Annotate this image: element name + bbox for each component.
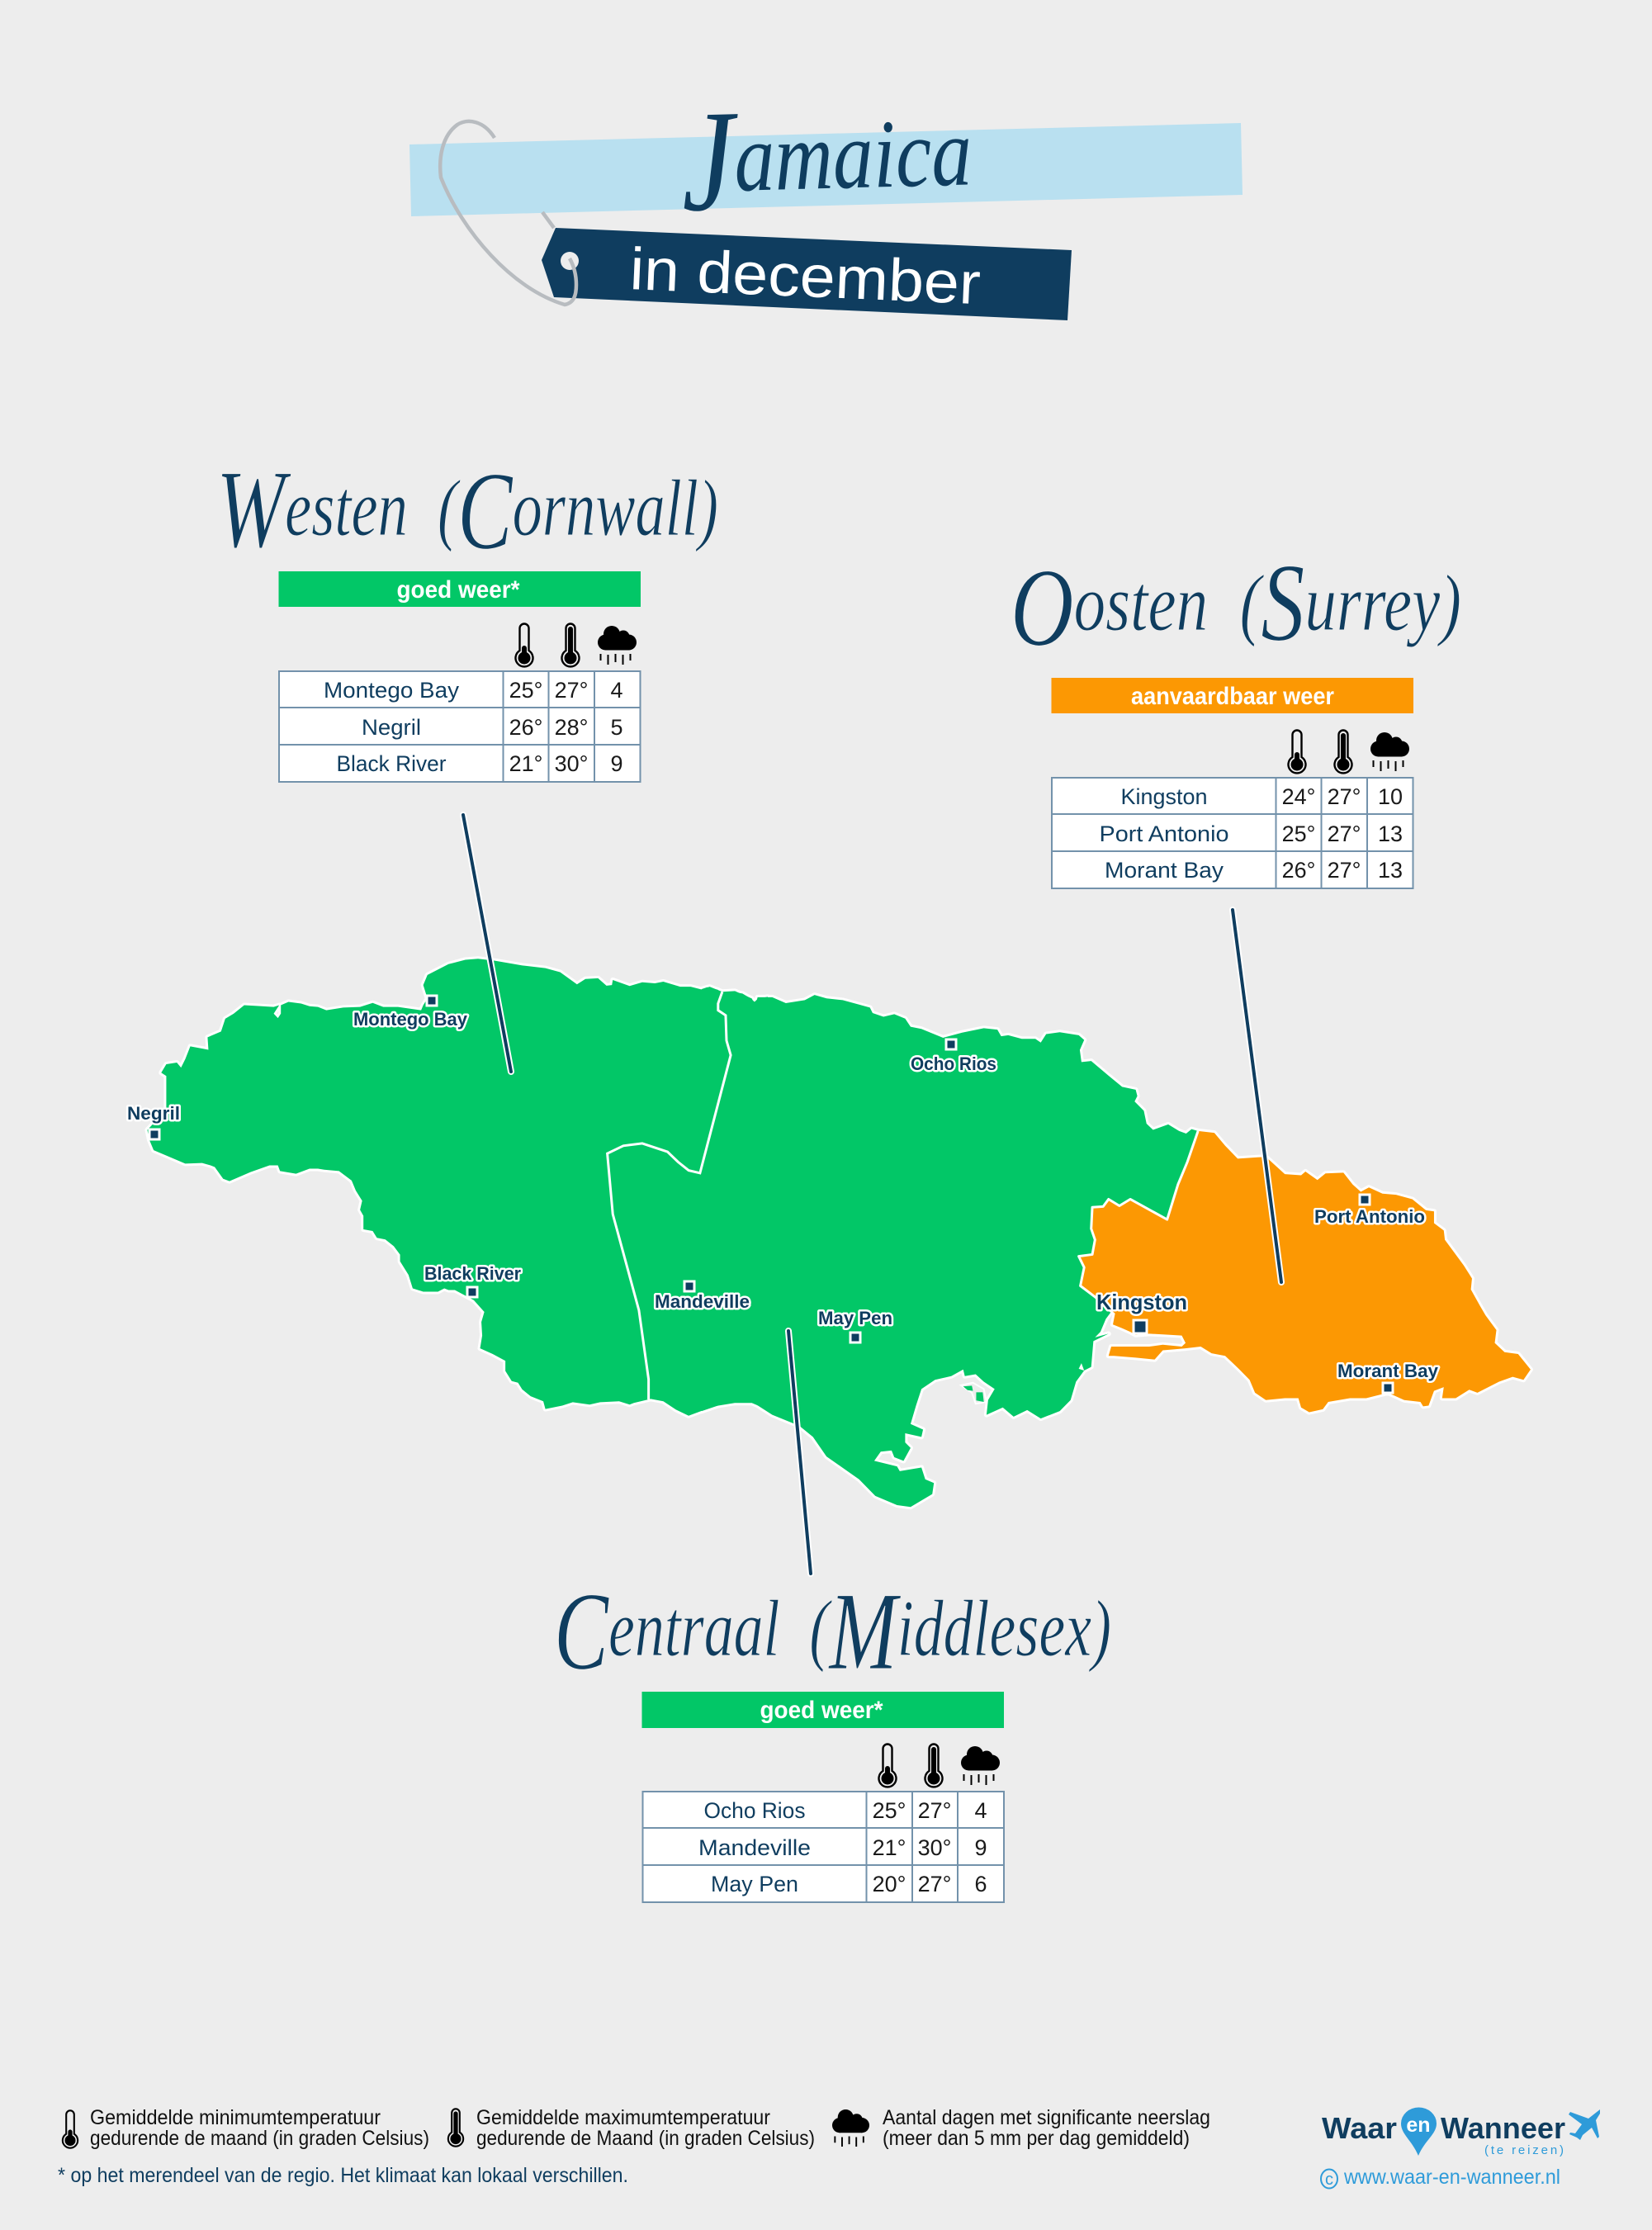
city: May Pen [818,1308,892,1342]
climate table: 26° [1282,858,1315,883]
climate table: 28° [555,715,588,740]
legend [58,2106,1210,2187]
legend text: precipitation: Aantal dagen met significante neerslag [883,2106,1210,2129]
climate table: 10 [1378,784,1403,809]
legend text: maximum temperature: gedurende de Maand (in graden Celsius) [476,2127,815,2150]
climate table: 20° [873,1872,906,1896]
heading: Westen (Cornwall): W [216,448,291,571]
city: Morant Bay: Morant Bay [1337,1361,1439,1381]
city: Ocho Rios [911,1039,996,1074]
tag string [440,121,576,305]
heading: Centraal (Middlesex): C [554,1570,609,1693]
text: in december: in december [628,236,982,317]
logo word: en: en [1406,2114,1431,2137]
pointer line: east [1233,910,1281,1282]
tag eyelet [561,252,579,270]
region border west-central [608,992,731,1399]
climate table: 30° [918,1835,951,1860]
climate table: 25° [1282,821,1315,846]
climate table: 27° [555,678,588,703]
climate table: Kingston [1121,784,1207,809]
title: Jamaica: amaica [733,97,973,212]
city: Kingston [1096,1290,1187,1333]
logo tagline: (te reizen) [1484,2143,1565,2157]
city: Ocho Rios: Ocho Rios [911,1053,996,1074]
copyright circle: c [1325,2171,1333,2189]
climate table: Morant Bay [1105,858,1224,883]
copyright circle [1321,2170,1337,2189]
icon: minimum temperature [878,1744,897,1787]
logo plane [1569,2109,1600,2140]
climate table: 21° [509,751,542,776]
city: Black River: Black River [424,1263,521,1284]
weather rating bar: aanvaardbaar weer [1131,683,1334,710]
title: Jamaica: J [679,80,741,242]
climate table: 25° [873,1798,906,1823]
heading: Oosten (Surrey): O [1011,547,1074,670]
icon: rain [1370,732,1409,771]
website url: www.waar-en-wanneer.nl [1343,2166,1560,2189]
climate table: 26° [509,715,542,740]
heading: Centraal (Middlesex): entraal ( [608,1584,832,1674]
climate table: 27° [918,1798,951,1823]
map of Jamaica [147,959,1531,1507]
climate table: Montego Bay [324,678,460,703]
west and central region fill [147,959,1198,1507]
city: Montego Bay [353,996,468,1030]
city: Mandeville: Mandeville [655,1291,750,1312]
climate table: 25° [509,678,542,703]
climate table: Black River [337,751,447,776]
climate table: Ocho Rios [703,1798,806,1823]
icon: maximum temperature [925,1744,943,1787]
pointer line: west [463,815,511,1072]
city: Montego Bay: Montego Bay [353,1009,468,1030]
logo pin [1401,2108,1437,2156]
climate table: Negril [362,715,421,740]
bay with islets [961,1383,987,1404]
icon: minimum temperature [515,624,533,666]
climate table: 9 [974,1835,987,1860]
city: Port Antonio: Port Antonio [1314,1206,1425,1227]
icon: minimum temperature [1288,730,1306,773]
heading: Westen (Cornwall): esten ( [285,464,461,553]
climate table: 4 [974,1798,987,1823]
climate table: 4 [610,678,623,703]
panel: central [554,1570,1111,1902]
climate table: 13 [1378,821,1403,846]
legend text: minimum temperature: Gemiddelde minimumtemperatuur [90,2106,381,2129]
icon: legend maximum temperature [448,2109,463,2147]
icon: rain [961,1746,1000,1785]
city: Kingston: Kingston [1096,1290,1187,1314]
climate table: 6 [974,1872,987,1896]
icon: rain [598,626,637,665]
east region fill [1079,1131,1531,1412]
city: Negril [127,1103,180,1139]
city: Negril: Negril [127,1103,180,1124]
heading: Centraal (Middlesex): M [828,1570,902,1693]
heading: Westen (Cornwall): C [457,450,514,573]
climate table: 27° [918,1872,951,1896]
city: May Pen: May Pen [818,1308,892,1328]
panel: west [216,448,718,782]
climate table: 9 [610,751,623,776]
city: Morant Bay [1337,1361,1439,1393]
climate table: Port Antonio [1100,821,1228,846]
icon: legend minimum temperature [63,2110,78,2148]
legend text: precipitation: (meer dan 5 mm per dag gemiddeld) [883,2127,1190,2150]
weather rating bar [642,1692,1004,1728]
city: Port Antonio [1314,1195,1425,1227]
climate table [642,1792,1004,1902]
icon: maximum temperature [561,624,580,666]
weather rating bar [279,571,641,607]
icon: maximum temperature [1334,730,1352,773]
legend text: minimum temperature: gedurende de maand (in graden Celsius) [90,2127,429,2150]
panel: east [1011,542,1461,888]
climate table [1052,778,1413,888]
climate table: 30° [555,751,588,776]
city: Black River [424,1263,521,1297]
logo word: Wanneer: Wanneer [1441,2111,1565,2145]
city: Mandeville [655,1281,750,1312]
footnote: * op het merendeel van de regio. Het klimaat kan lokaal verschillen. [58,2164,628,2187]
climate table [279,671,641,782]
legend text: maximum temperature: Gemiddelde maximumtemperatuur [476,2106,770,2129]
pointer line: central [788,1331,811,1574]
region border central-east [1079,1131,1198,1312]
heading: Centraal (Middlesex): iddlesex) [897,1584,1111,1674]
navy tag label [542,228,1072,320]
climate table: 27° [1328,858,1361,883]
logo word: Waar: Waar [1322,2111,1397,2145]
heading: Oosten (Surrey): urrey) [1304,559,1461,648]
climate table: 5 [610,715,623,740]
climate table: 24° [1282,784,1315,809]
heading: Oosten (Surrey): S [1261,542,1304,665]
title banner: Jamaica in december [409,73,1243,320]
climate table: 27° [1328,821,1361,846]
island white coastline [147,959,1531,1507]
heading: Westen (Cornwall): ornwall) [513,464,718,553]
climate table: 21° [873,1835,906,1860]
climate table: May Pen [711,1872,798,1896]
heading: Oosten (Surrey): osten ( [1074,559,1265,648]
weather rating bar [1052,678,1413,713]
climate table: 27° [1328,784,1361,809]
climate table: Mandeville [698,1835,811,1860]
climate table: 13 [1378,858,1403,883]
icon: legend rain [832,2109,869,2147]
light blue title band [409,123,1243,216]
weather rating bar: goed weer* [396,576,520,604]
weather rating bar: goed weer* [760,1697,883,1724]
logo: Waar en Wanneer [1321,2108,1600,2189]
